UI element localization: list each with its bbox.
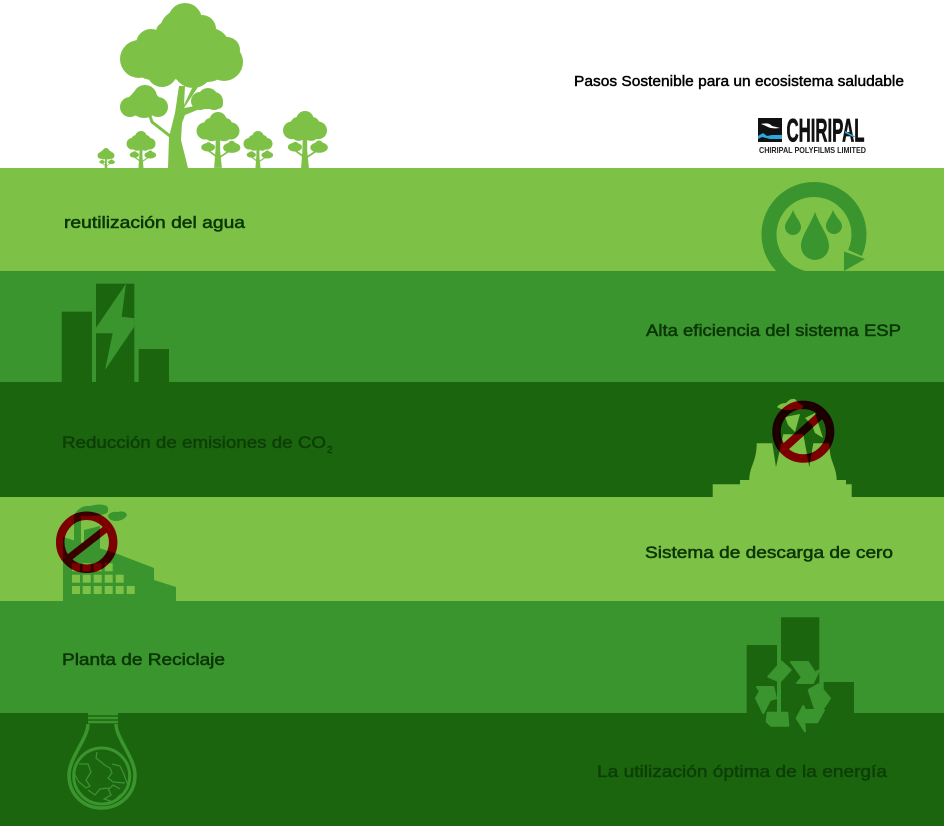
label: recycling plant: Planta de Reciclaje xyxy=(62,650,225,669)
label: zero discharge: Sistema de descarga de cero xyxy=(645,543,893,562)
icon: recycling over bars xyxy=(747,617,854,731)
prohibition sign xyxy=(60,516,113,569)
label: ESP system: Alta eficiencia del sistema ESP xyxy=(646,321,901,340)
band 3: CO2 reduction xyxy=(0,382,944,497)
prohibition sign xyxy=(776,405,830,459)
icon: water recycling xyxy=(769,190,865,280)
logo: Chiripal: CHIRIPAL POLYFILMS LIMITED xyxy=(759,145,866,155)
band 4: zero discharge xyxy=(0,497,944,601)
icon: small trees xyxy=(98,111,328,170)
factory windows xyxy=(72,563,135,594)
label: energy use: La utilización óptima de la energía xyxy=(597,762,888,781)
icon: big tree xyxy=(120,3,243,168)
icon: light bulb with globe xyxy=(69,714,135,808)
band 5: recycling plant xyxy=(0,601,944,713)
icon: factory with prohibition sign xyxy=(60,504,176,601)
logo: Chiripal xyxy=(758,112,866,155)
band 1: water reuse xyxy=(0,168,944,271)
recycling arrows xyxy=(756,662,830,731)
label: CO2 emissions: 2 xyxy=(327,445,333,456)
label: water reuse: reutilización del agua xyxy=(64,213,246,232)
logo: Chiripal: CHIRIPAL xyxy=(786,112,864,148)
background: white header xyxy=(0,0,944,168)
icon: power plant with prohibition sign xyxy=(713,399,852,497)
globe continents xyxy=(75,752,128,802)
icon: power bars with bolt xyxy=(62,284,169,382)
band 6: energy use xyxy=(0,713,944,826)
band 2: ESP efficiency xyxy=(0,271,944,382)
title: Pasos Sostenible para un ecosistema saludable xyxy=(574,73,904,90)
label: CO2 emissions: Reducción de emisiones de CO xyxy=(62,433,326,452)
